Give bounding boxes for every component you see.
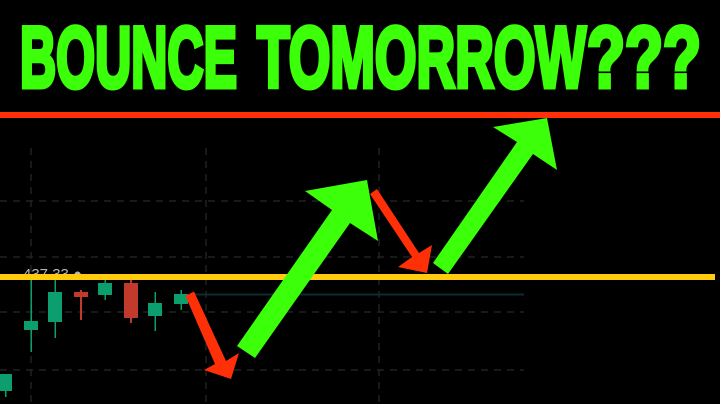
yellow support line: [0, 274, 715, 280]
title: BOUNCE: [20, 10, 237, 106]
candlesticks: [0, 278, 188, 397]
arrow: red down 1: [186, 292, 239, 379]
arrow: red down 2: [370, 189, 432, 273]
arrow: green up 1: [237, 180, 378, 358]
arrow: green up 2: [433, 118, 557, 274]
price label: 437.33 ●: [23, 266, 82, 283]
red resistance line: [0, 112, 720, 118]
title: [20, 10, 701, 106]
